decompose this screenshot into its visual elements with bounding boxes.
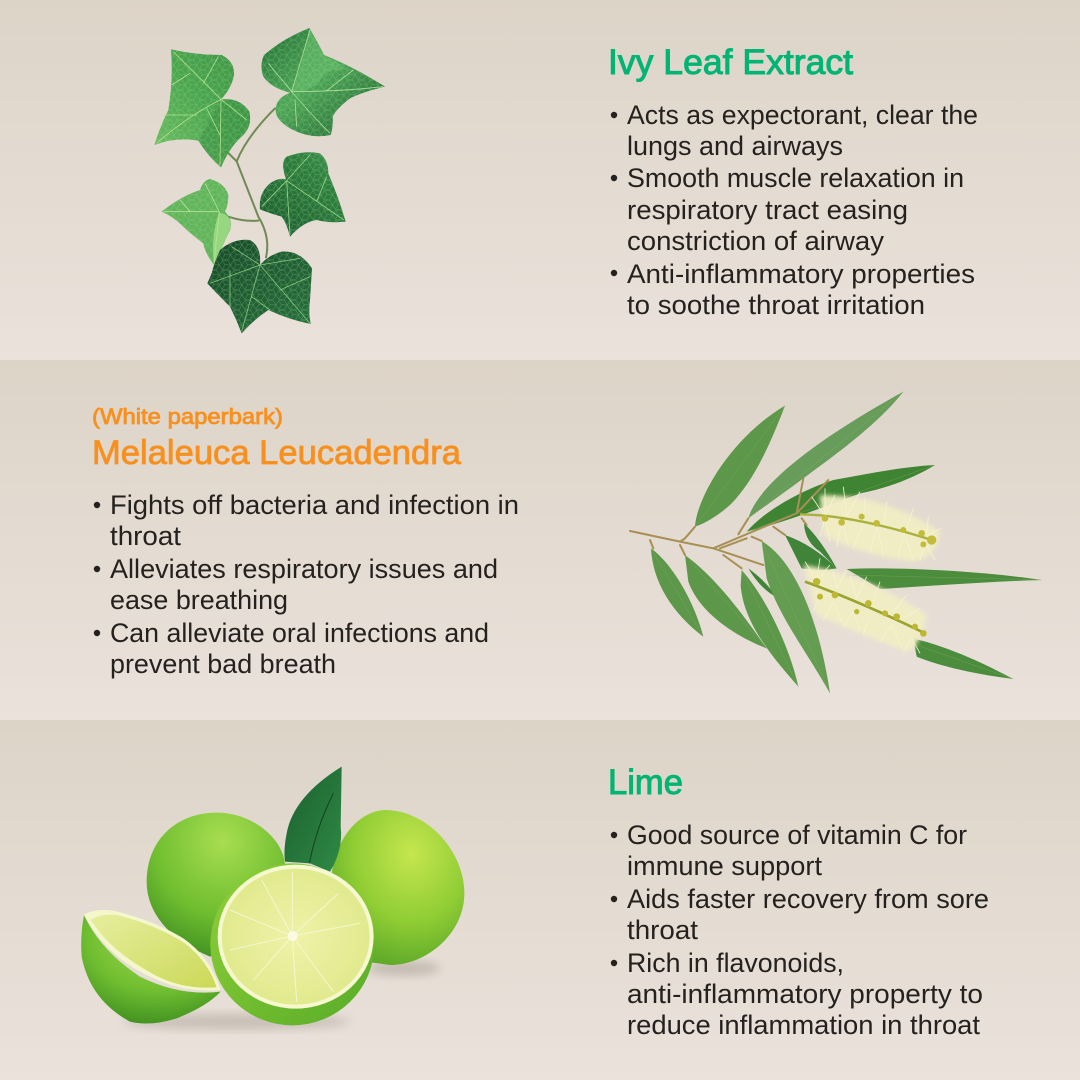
bullet list: melaleuca benefits: Alleviates respiratory issues and xyxy=(110,554,498,584)
bullet list: ivy benefits: Acts as expectorant, clear the xyxy=(627,100,978,130)
bullet list: ivy benefits: Smooth muscle relaxation in xyxy=(627,163,964,193)
bullet list: lime benefits: Rich in flavonoids, xyxy=(627,948,844,978)
bullet list: lime benefits: reduce inflammation in throat xyxy=(627,1010,980,1040)
bullet list: ivy benefits: lungs and airways xyxy=(627,131,843,161)
illustration: limes xyxy=(81,767,464,1030)
bullet list: lime benefits: anti-inflammatory property to xyxy=(627,979,983,1009)
bullet list: melaleuca benefits: ease breathing xyxy=(110,585,288,615)
bullet list: lime benefits: Aids faster recovery from sore xyxy=(627,884,989,914)
leaf xyxy=(284,767,342,872)
bullet list: melaleuca benefits: Fights off bacteria and infection in xyxy=(110,490,519,520)
bullet list: melaleuca benefits: throat xyxy=(110,521,182,551)
illustration: melaleuca branch xyxy=(630,392,1042,693)
bullet list: ivy benefits: constriction of airway xyxy=(627,226,884,256)
panel: lime xyxy=(0,720,1080,1080)
flower spike: lower xyxy=(803,558,927,653)
illustration: ivy sprig xyxy=(154,28,385,333)
panel: melaleuca leucadendra xyxy=(0,360,1080,720)
bullet list: melaleuca benefits xyxy=(94,490,519,679)
bullet list: melaleuca benefits: Can alleviate oral infections and xyxy=(110,618,489,648)
bullet list: lime benefits: immune support xyxy=(627,851,822,881)
bullet list: ivy benefits: respiratory tract easing xyxy=(627,195,908,225)
lime: back right xyxy=(332,810,464,965)
bullet list: ivy benefits: Anti-inflammatory properties xyxy=(627,259,975,289)
lime wedge xyxy=(81,910,221,1024)
bullet list: lime benefits: throat xyxy=(627,915,699,945)
heading: lime: Lime xyxy=(608,763,683,802)
panel: ivy leaf extract xyxy=(0,0,1080,360)
heading: melaleuca leucadendra: Melaleuca Leucadendra xyxy=(92,434,461,472)
lime: back left xyxy=(147,813,285,957)
half lime: cut face xyxy=(210,863,374,1025)
flower spike: upper xyxy=(800,487,942,562)
subheading: white paperbark: (White paperbark) xyxy=(92,404,283,429)
heading: ivy leaf extract: Ivy Leaf Extract xyxy=(608,43,853,82)
bullet list: ivy benefits xyxy=(611,100,978,320)
bullet list: lime benefits xyxy=(611,820,989,1040)
bullet list: lime benefits: Good source of vitamin C for xyxy=(627,820,967,850)
bullet list: ivy benefits: to soothe throat irritation xyxy=(627,290,925,320)
bullet list: melaleuca benefits: prevent bad breath xyxy=(110,649,336,679)
